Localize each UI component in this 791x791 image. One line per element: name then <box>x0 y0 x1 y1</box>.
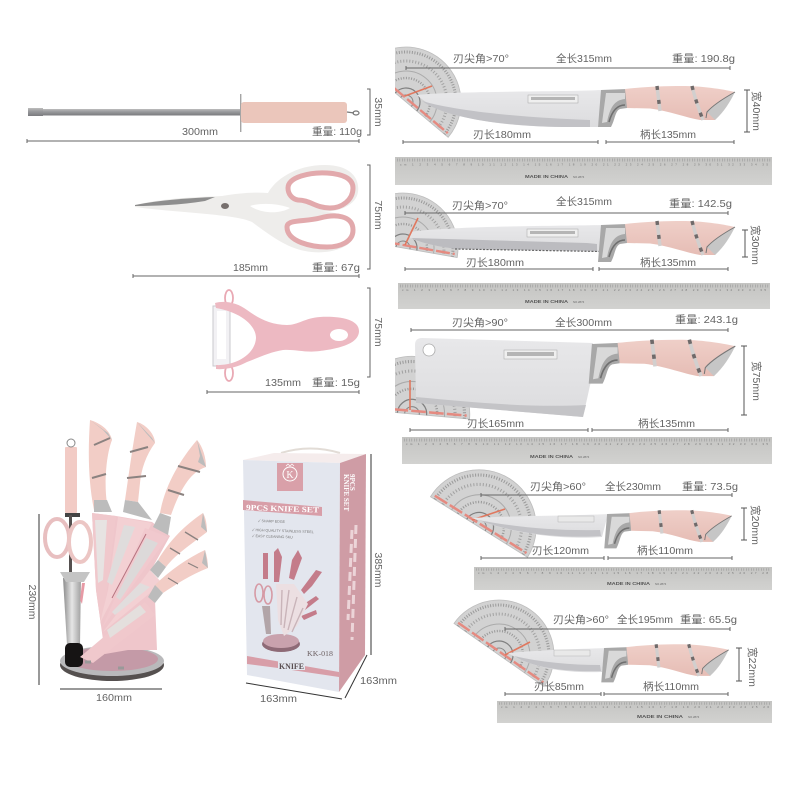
label: handle length: 柄长135mm <box>640 256 696 269</box>
ruler: cm 1 2 3 4 5 6 7 8 9 10 11 12 13 14 15 16 17 18 19 20 21 22 23 24 25 26 27 28 29 30 31 32 33 34 35 <box>400 162 768 166</box>
dimension: peeler length line <box>207 390 359 394</box>
blade <box>417 90 602 127</box>
label: total length: 全长230mm <box>605 480 661 493</box>
dimension: blade line <box>505 692 601 696</box>
tool: peeler <box>207 288 384 394</box>
sharpener in block <box>65 447 77 513</box>
label: handle length: 柄长110mm <box>643 680 699 693</box>
label: width: 宽75mm <box>750 361 763 401</box>
ruler: NO.2874 <box>578 455 590 459</box>
ruler: NO.2874 <box>573 175 585 179</box>
blade <box>472 514 608 538</box>
panel: knife block set <box>26 420 208 704</box>
label: tip angle: 刃尖角>60° <box>530 480 586 493</box>
dimension: blade line <box>405 267 593 271</box>
dimension: width bar <box>741 346 747 415</box>
label: box width: 163mm <box>260 693 297 705</box>
base disc <box>60 649 164 681</box>
dimension: width bar <box>736 648 742 681</box>
label: scissors height: 75mm <box>372 200 384 230</box>
box logo badge: K <box>286 470 294 481</box>
dimension: box depth line <box>345 655 367 698</box>
ruler: NO.2874 <box>573 300 585 304</box>
dimension: rod length line <box>27 139 359 143</box>
dimension: box width line <box>246 683 342 699</box>
tool: sharpening rod <box>27 89 384 143</box>
box feature bullets: ✓ EASY CLEANING SKU <box>252 534 293 539</box>
dimension: rod height bar <box>367 89 370 135</box>
label: tip angle: 刃尖角>60° <box>553 613 609 626</box>
dimension: block height bar <box>38 514 40 685</box>
label: blade length: 刃长85mm <box>534 681 584 693</box>
dimension: handle line <box>592 428 728 432</box>
ruler <box>395 157 772 185</box>
dimension: total line <box>405 211 728 215</box>
ruler: MADE IN CHINA <box>607 581 651 586</box>
dimension: block width bar <box>60 688 162 690</box>
box model number: KK-018 <box>307 650 334 658</box>
dimension: width bar <box>744 90 750 132</box>
label: box height: 385mm <box>372 552 384 588</box>
handle <box>604 510 732 548</box>
dimension: total line <box>406 66 730 70</box>
dimension: total line <box>505 627 730 631</box>
dimension: scissors height bar <box>367 165 370 269</box>
label: weight: 重量: 243.1g <box>675 313 738 326</box>
protractor <box>395 356 470 420</box>
label: peeler height: 75mm <box>372 317 384 347</box>
label: scissors weight: 重量: 67g <box>312 261 360 274</box>
box feature bullets <box>252 519 314 539</box>
label: handle length: 柄长135mm <box>640 128 696 141</box>
panel: chef knife <box>395 46 772 185</box>
dimension: total line <box>411 328 728 332</box>
box lower band <box>247 656 339 677</box>
label: total length: 全长315mm <box>556 195 612 208</box>
label: rod length: 300mm <box>182 126 218 138</box>
box banner <box>243 500 322 516</box>
box banner: 9PCS KNIFE SET <box>246 503 320 515</box>
blade <box>410 338 593 417</box>
label: block width: 160mm <box>96 692 132 704</box>
block body backing <box>92 513 170 654</box>
box lower band: KNIFE <box>279 662 304 671</box>
label: scissors length: 185mm <box>233 262 268 274</box>
handle <box>601 644 729 682</box>
knife handle 2 <box>125 422 155 502</box>
label: rod height: 35mm <box>372 97 384 127</box>
panel: utility knife <box>430 448 772 590</box>
box mini product image <box>255 548 322 652</box>
label: width: 宽40mm <box>750 91 763 131</box>
label: handle length: 柄长135mm <box>638 417 695 430</box>
dimension: blade line <box>410 428 588 432</box>
label: block height: 230mm <box>26 584 38 620</box>
label: total length: 全长300mm <box>555 316 612 329</box>
dimension: scissors length line <box>133 274 359 278</box>
dimension: handle line <box>608 556 732 560</box>
label: peeler weight: 重量: 15g <box>312 376 360 389</box>
dimension: handle line <box>604 692 728 696</box>
dimension: width bar <box>742 230 748 257</box>
handle <box>598 86 735 127</box>
box handle <box>281 448 340 453</box>
ruler <box>402 437 772 464</box>
blade <box>508 648 605 672</box>
label: weight: 重量: 73.5g <box>682 480 738 493</box>
label: tip angle: 刃尖角>70° <box>453 52 509 65</box>
label: blade length: 刃长180mm <box>473 129 531 141</box>
ruler: MADE IN CHINA <box>530 454 574 459</box>
dimension: blade line <box>403 140 598 144</box>
protractor <box>395 46 460 138</box>
protractor <box>430 448 558 557</box>
ruler: cm 1 2 3 4 5 6 7 8 9 10 11 12 13 14 15 16 17 18 19 20 21 22 23 24 25 26 27 28 29 30 31 32 33 34 35 <box>402 288 766 292</box>
handle <box>598 221 735 262</box>
label: width: 宽30mm <box>749 225 762 265</box>
knife handle 1 <box>89 420 112 510</box>
box side title: KNIFE SET <box>342 474 350 511</box>
box top <box>243 453 366 463</box>
dimension: total line <box>481 493 732 497</box>
label: handle length: 柄长110mm <box>637 544 693 557</box>
ruler <box>398 283 770 309</box>
dimension: peeler height bar <box>367 288 370 377</box>
protractor <box>395 192 458 258</box>
blade <box>405 218 602 252</box>
label: total length: 全长315mm <box>556 52 612 65</box>
box feature bullets: ✓ HIGH QUALITY STAINLESS STEEL <box>252 528 314 534</box>
box feature bullets: ✓ SHARP EDGE <box>258 519 286 524</box>
box logo badge <box>277 463 303 491</box>
panel: paring knife <box>454 578 772 723</box>
label: total length: 全长195mm <box>617 613 673 626</box>
panel: gift box <box>243 448 397 705</box>
ruler: cm 1 2 3 4 5 6 7 8 9 10 11 12 13 14 15 16 17 18 19 20 21 22 23 24 25 26 <box>501 705 769 709</box>
ruler: cm 1 2 3 4 5 6 7 8 9 10 11 12 13 14 15 16 17 18 19 20 21 22 23 24 25 26 27 28 29 30 31 32 33 34 35 <box>406 442 768 446</box>
dimension: handle line <box>606 140 734 144</box>
handle <box>589 340 735 384</box>
label: tip angle: 刃尖角>70° <box>452 199 508 212</box>
ruler: NO.2874 <box>655 582 667 586</box>
box side <box>339 454 366 692</box>
label: weight: 重量: 65.5g <box>680 613 737 626</box>
label: weight: 重量: 142.5g <box>669 197 732 210</box>
ruler: MADE IN CHINA <box>525 299 569 304</box>
label: blade length: 刃长180mm <box>466 257 524 269</box>
ruler: MADE IN CHINA <box>525 174 569 179</box>
label: box depth: 163mm <box>360 675 397 687</box>
dimension: width bar <box>741 508 747 540</box>
protractor <box>454 578 576 687</box>
label: blade length: 刃长120mm <box>532 545 589 557</box>
box side graphics <box>348 525 356 640</box>
dimension: box height bar <box>370 454 372 655</box>
box front <box>243 460 340 692</box>
ruler <box>474 567 772 590</box>
label: rod weight: 重量: 110g <box>312 125 362 138</box>
dimension: blade line <box>481 556 604 560</box>
panel: bread knife <box>395 192 770 309</box>
box side title: 9PCS <box>348 474 356 491</box>
label: width: 宽22mm <box>746 647 759 687</box>
ruler <box>497 701 772 723</box>
ruler: cm 1 2 3 4 5 6 7 8 9 10 11 12 13 14 15 16 17 18 19 20 21 22 23 24 25 26 27 28 <box>478 571 768 575</box>
label: tip angle: 刃尖角>90° <box>452 316 508 329</box>
label: blade length: 刃长165mm <box>467 418 524 430</box>
block slots <box>92 513 116 625</box>
label: width: 宽20mm <box>749 505 762 545</box>
ruler: NO.2874 <box>688 715 700 719</box>
dimension: handle line <box>599 267 728 271</box>
label: weight: 重量: 190.8g <box>672 52 735 65</box>
knife handle 4 <box>158 513 207 567</box>
panel: cleaver <box>395 314 772 464</box>
scissors in block <box>45 519 69 557</box>
box side title <box>342 474 356 511</box>
tool: scissors <box>133 165 384 278</box>
knife handle 3 <box>160 440 206 515</box>
label: peeler length: 135mm <box>265 377 301 389</box>
ruler: MADE IN CHINA <box>637 714 684 719</box>
knife handle 5 <box>155 550 208 593</box>
